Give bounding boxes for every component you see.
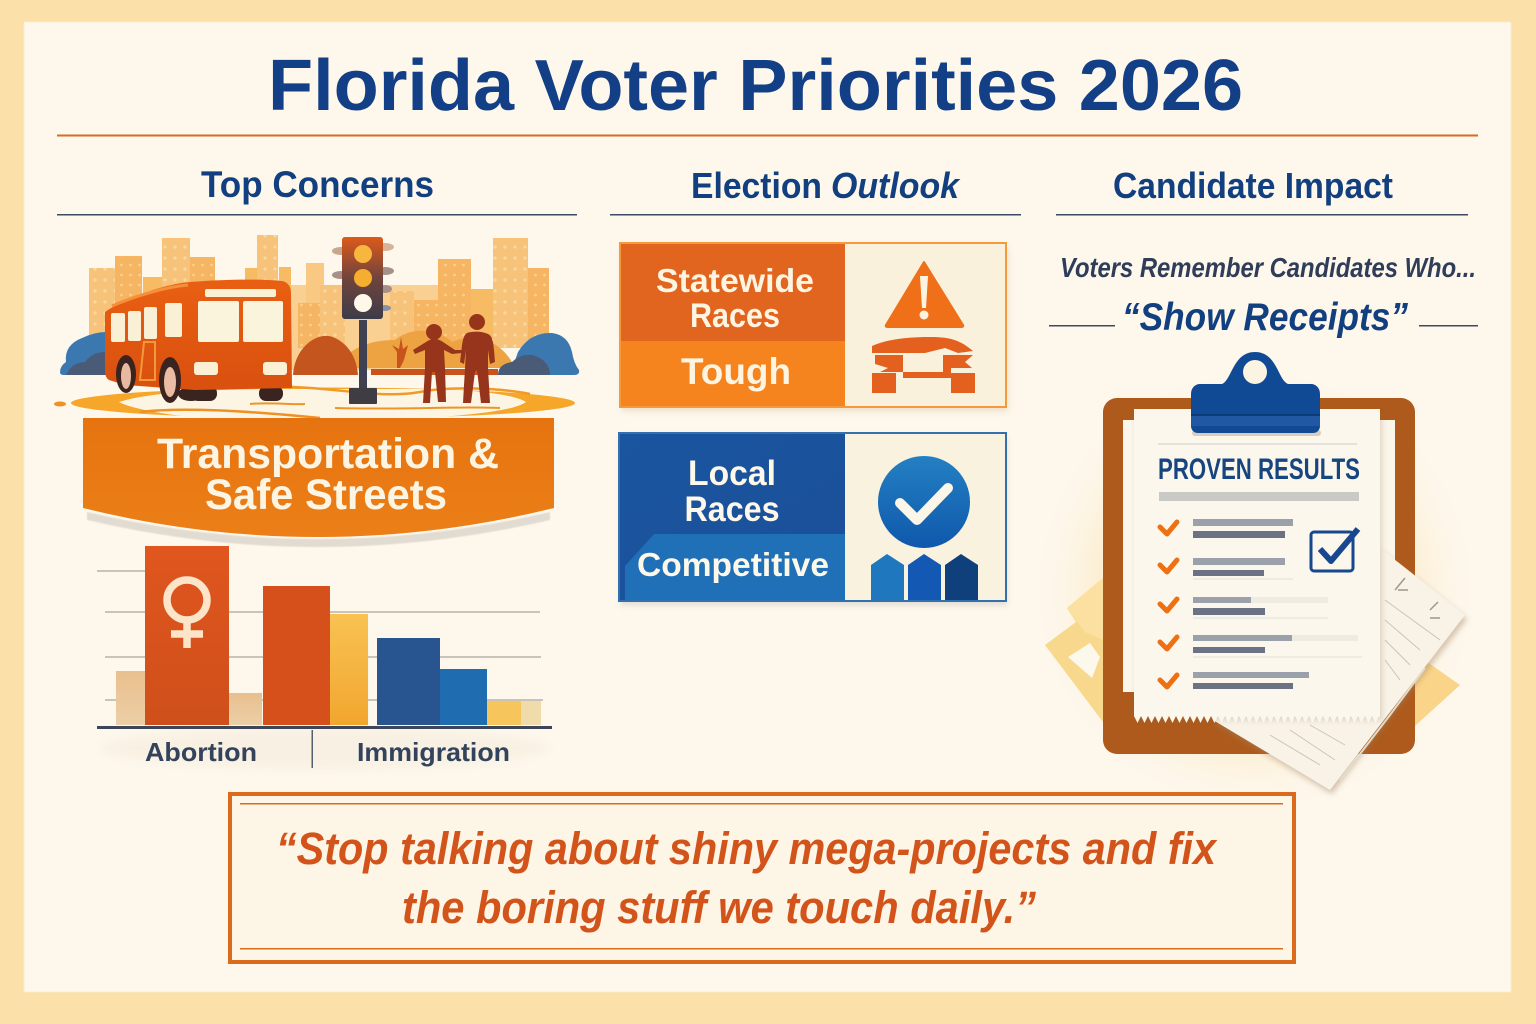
bushes and hills: [60, 331, 579, 375]
callout: quote: “Stop talking about shiny mega-projects and fix: [276, 823, 1218, 874]
card: statewide races tough: [620, 243, 1008, 411]
banner: transportation and safe streets: Transportation &: [157, 430, 499, 478]
callout: quote: [230, 794, 1294, 962]
icon: blue checkbox: [1311, 529, 1358, 571]
heading: top concerns: Top Concerns: [201, 164, 434, 205]
callout: quote: the boring stuff we touch daily.”: [402, 882, 1036, 933]
illustration: clipboard with receipt: [1030, 352, 1480, 815]
road: [54, 387, 575, 418]
bar chart: abortion and immigration: [97, 546, 552, 770]
panel: candidate impact: [1030, 165, 1480, 815]
icon: three columns: [871, 554, 978, 600]
traffic light: [332, 237, 394, 404]
icon: warning triangle: [886, 262, 963, 327]
panel: top concerns: [54, 164, 579, 770]
receipt page: PROVEN RESULTS: [1158, 453, 1360, 486]
bus: [105, 280, 292, 403]
checklist rows: [1160, 519, 1362, 689]
folders: [1045, 578, 1460, 735]
subheading: voters remember: “Show Receipts”: [1122, 296, 1408, 339]
card: statewide races tough: Statewide: [656, 262, 814, 299]
card: local races competitive: Competitive: [637, 546, 829, 583]
card: local races competitive: Local: [688, 454, 776, 493]
heading: election outlook: Outlook: [831, 165, 961, 206]
title: Florida Voter Priorities 2026: [268, 46, 1243, 126]
clipboard clip: [1191, 352, 1321, 436]
under page: [1123, 420, 1395, 692]
heading: election outlook: [610, 165, 1021, 216]
pedestrians: [413, 314, 495, 403]
bar chart: abortion and immigration: Immigration: [357, 737, 510, 767]
card: local races competitive: Races: [684, 490, 780, 529]
card: local races competitive: [619, 433, 1007, 605]
subheading: voters remember: Voters Remember Candidates Who...: [1060, 252, 1476, 283]
panel: election outlook: [610, 165, 1021, 605]
tilted papers: [1213, 548, 1467, 794]
icon: female symbol: [167, 580, 207, 648]
banner: transportation and safe streets: Safe Streets: [205, 471, 447, 519]
illustration: city street scene: [54, 235, 579, 418]
heading: candidate impact: Candidate Impact: [1113, 165, 1393, 206]
banner: transportation and safe streets: [83, 418, 554, 547]
city skyline: [89, 235, 549, 370]
heading: election outlook: Election: [691, 165, 822, 206]
icon: check circle: [878, 456, 970, 548]
clipboard board: [1103, 398, 1415, 754]
subheading: voters remember: [1049, 252, 1478, 339]
card: statewide races tough: Races: [690, 297, 780, 335]
bar chart: abortion and immigration: Abortion: [145, 737, 257, 767]
receipt page: [1134, 409, 1382, 723]
icon: damaged car: [872, 337, 975, 393]
card: statewide races tough: Tough: [681, 351, 791, 392]
